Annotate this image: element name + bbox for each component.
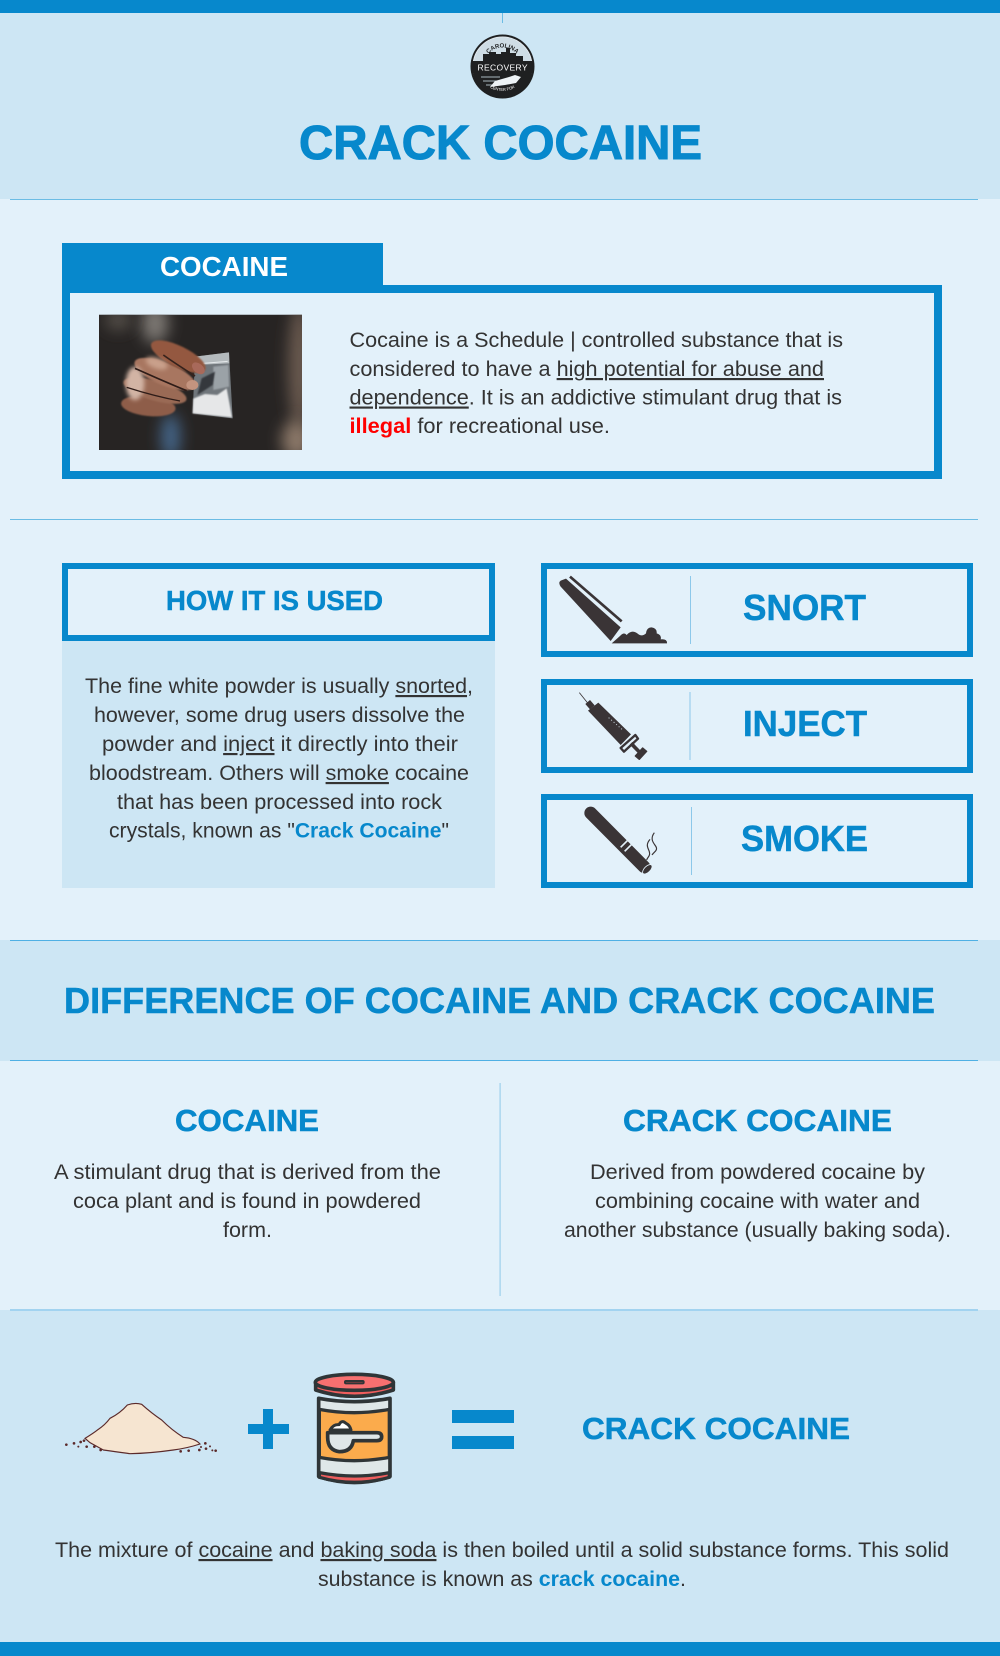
column: cocaine: coca plant and is found in powdered bbox=[73, 1189, 421, 1213]
column: crack cocaine: another substance (usually baking soda). bbox=[564, 1218, 951, 1242]
band: difference heading bbox=[0, 940, 1000, 1061]
how it is used description: The fine white powder is usually snorted, bbox=[85, 674, 473, 698]
panel: how it is used bbox=[62, 566, 495, 888]
column: cocaine: form. bbox=[223, 1218, 272, 1242]
how it is used description: bloodstream. Others will smoke cocaine bbox=[89, 761, 469, 785]
divider bbox=[10, 519, 978, 520]
tab: cocaine heading bbox=[62, 243, 383, 293]
cocaine description: considered to have a high potential for abuse and bbox=[350, 357, 824, 381]
card: inject: INJECT bbox=[743, 703, 867, 744]
panel: cocaine bbox=[62, 243, 938, 475]
panel: formula bbox=[0, 1309, 1000, 1642]
cocaine description bbox=[350, 328, 843, 438]
logo: Carolina Recovery: CAROLINA bbox=[486, 43, 518, 54]
how it is used description: powder and inject it directly into their bbox=[102, 732, 458, 756]
column: cocaine: A stimulant drug that is derived from the bbox=[54, 1160, 441, 1184]
card: snort bbox=[544, 566, 970, 654]
icon: baking soda jar bbox=[315, 1374, 393, 1482]
icon: plus sign bbox=[248, 1409, 289, 1449]
card: snort: SNORT bbox=[743, 587, 866, 628]
formula description: substance is known as crack cocaine. bbox=[318, 1567, 686, 1591]
photo: hand holding bag of powder bbox=[99, 314, 302, 450]
title: CRACK COCAINE bbox=[299, 117, 702, 170]
how it is used description bbox=[85, 674, 473, 842]
logo: Carolina Recovery: CENTER FOR bbox=[490, 86, 515, 91]
card: inject bbox=[544, 682, 970, 770]
bag bbox=[193, 352, 233, 418]
formula description: The mixture of cocaine and baking soda is then boiled until a solid substance forms. This solid bbox=[55, 1538, 949, 1562]
bottom bar bbox=[0, 1642, 1000, 1656]
hand bbox=[120, 396, 176, 418]
icon: equals sign bbox=[452, 1410, 514, 1449]
column: crack cocaine: CRACK COCAINE bbox=[623, 1103, 892, 1138]
cocaine description: Cocaine is a Schedule | controlled substance that is bbox=[350, 328, 843, 352]
icon: cigarette with smoke bbox=[591, 813, 657, 876]
heading box: HOW IT IS USED bbox=[166, 585, 383, 616]
card: smoke: SMOKE bbox=[741, 818, 868, 859]
heading box bbox=[65, 566, 492, 638]
how it is used description: however, some drug users dissolve the bbox=[94, 703, 465, 727]
header band bbox=[0, 0, 1000, 200]
column: crack cocaine: Derived from powdered cocaine by bbox=[590, 1160, 925, 1184]
result label: CRACK COCAINE bbox=[582, 1411, 850, 1446]
cocaine box frame bbox=[66, 289, 938, 475]
column: cocaine: COCAINE bbox=[175, 1103, 319, 1138]
icon: snorting tube and powder bbox=[559, 577, 667, 643]
logo: Carolina Recovery: RECOVERY bbox=[478, 62, 528, 72]
band: difference heading: DIFFERENCE OF COCAINE AND CRACK COCAINE bbox=[64, 980, 935, 1021]
card: smoke bbox=[544, 797, 970, 885]
how it is used description: that has been processed into rock bbox=[117, 790, 442, 814]
column: cocaine bbox=[54, 1103, 441, 1242]
icon: syringe bbox=[579, 693, 647, 759]
cocaine description: dependence. It is an addictive stimulant drug that is bbox=[350, 386, 842, 410]
cocaine description: illegal for recreational use. bbox=[350, 414, 610, 438]
column: crack cocaine: combining cocaine with water and bbox=[595, 1189, 920, 1213]
tab: cocaine heading: COCAINE bbox=[160, 251, 288, 282]
how it is used description: crystals, known as "Crack Cocaine" bbox=[109, 818, 449, 842]
icon: powder pile bbox=[65, 1403, 217, 1454]
column divider bbox=[500, 1083, 501, 1296]
text panel background bbox=[62, 641, 495, 888]
formula description bbox=[55, 1538, 949, 1591]
logo: Carolina Recovery bbox=[470, 34, 534, 98]
column: crack cocaine bbox=[564, 1103, 951, 1242]
